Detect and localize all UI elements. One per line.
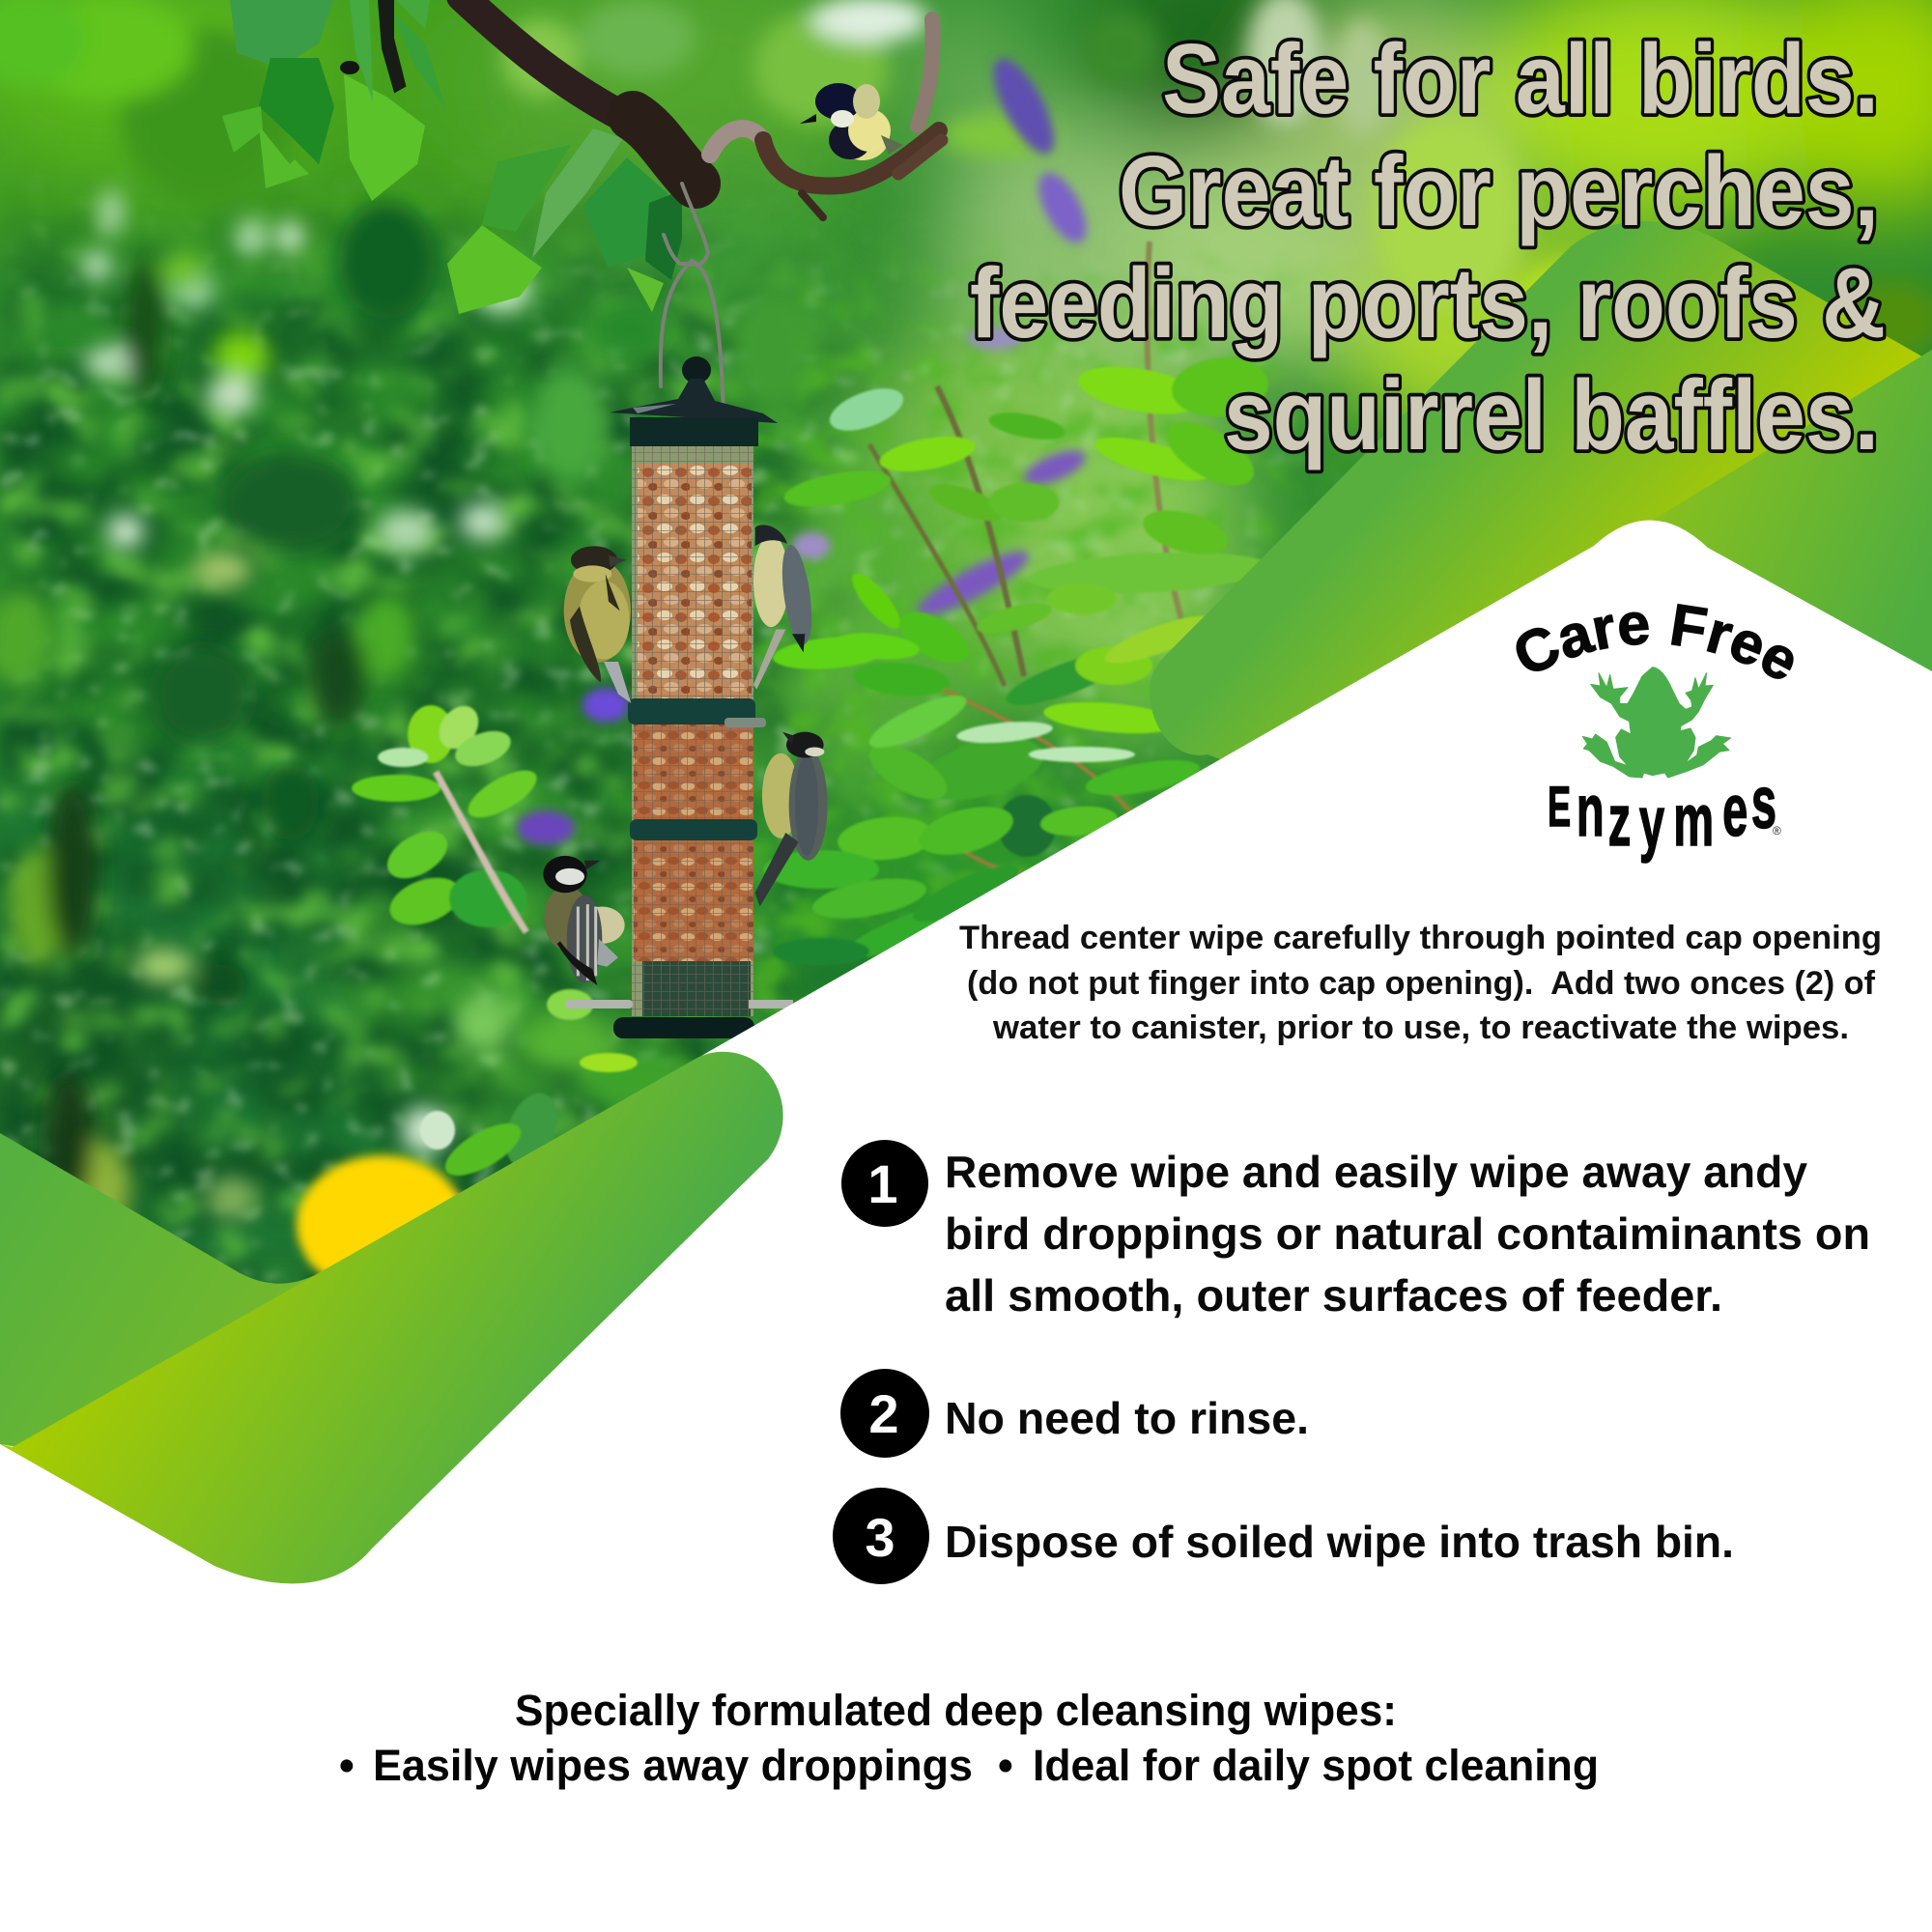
icon: bird feeder xyxy=(565,356,793,1038)
bottom benefits text: • xyxy=(998,1741,1013,1790)
step 2 xyxy=(840,1369,1309,1458)
bokeh blobs xyxy=(0,0,1932,1236)
right green band xyxy=(1642,350,1932,686)
bird upper left xyxy=(564,546,631,703)
panel: top-right green shape xyxy=(1150,221,1932,773)
step 1 number badge xyxy=(841,1140,928,1227)
step 3 text: Dispose of soiled wipe into trash bin. xyxy=(945,1517,1734,1567)
out-of-focus foliage colour zones xyxy=(0,0,1932,1314)
photo background: birds at a garden feeder xyxy=(0,0,1932,1284)
icon: frog xyxy=(1582,668,1731,778)
bottom benefits text: • xyxy=(339,1741,355,1790)
logo: Care Free Enzymes xyxy=(1517,603,1794,864)
instructions text block: water to canister, prior to use, to reactivate the wipes. xyxy=(992,1009,1849,1046)
purple flowers xyxy=(517,50,1096,845)
bird lower right xyxy=(755,732,828,907)
icon: birds on feeder xyxy=(543,525,828,985)
bottom benefits text: Specially formulated deep cleansing wipes: xyxy=(515,1686,1397,1735)
darker green chevron xyxy=(0,1133,328,1449)
foreground leaves and twigs around feeder xyxy=(352,242,1271,1186)
step 1 text xyxy=(945,1147,1870,1321)
step 2 text: No need to rinse. xyxy=(945,1393,1309,1443)
logo text bottom: Enzymes xyxy=(1548,763,1776,864)
step 1 text: bird droppings or natural contaiminants on xyxy=(945,1208,1870,1259)
bottom benefits text: Easily wipes away droppings xyxy=(373,1741,973,1790)
step 1 text: Remove wipe and easily wipe away andy xyxy=(945,1147,1807,1197)
icon: feeder hook and wires xyxy=(661,184,724,415)
step 3 number badge xyxy=(833,1488,929,1584)
feeder mesh and peanuts xyxy=(632,446,753,1016)
registered mark: ® xyxy=(1773,824,1781,838)
feeder bands xyxy=(628,698,757,840)
step 1 text: all smooth, outer surfaces of feeder. xyxy=(945,1270,1722,1321)
lime gradient chevron xyxy=(0,1052,783,1583)
logo text top: Care Free xyxy=(1517,603,1794,679)
yellow flower xyxy=(297,1155,467,1294)
step 2 number badge: 2 xyxy=(868,1383,899,1444)
step 1 xyxy=(841,1140,1870,1321)
lime-to-green rounded chevron xyxy=(1150,221,1927,773)
step 3 number badge: 3 xyxy=(865,1507,895,1568)
panel: white content background xyxy=(0,520,1932,1932)
icon: leaves on upper branch xyxy=(222,0,682,314)
bird lower left xyxy=(543,856,625,985)
step 2 number badge xyxy=(840,1369,929,1458)
feeder perches and base xyxy=(565,718,793,1038)
step 1 number badge: 1 xyxy=(867,1153,898,1214)
bottom benefits text: Ideal for daily spot cleaning xyxy=(1033,1741,1599,1790)
icon: small bird on branch xyxy=(800,83,903,160)
icon: hanging branch xyxy=(462,0,942,217)
panel: lower-left green shapes xyxy=(0,1052,783,1583)
heading xyxy=(970,23,1886,470)
instructions text block: Thread center wipe carefully through pointed cap opening xyxy=(959,920,1882,956)
instructions text block xyxy=(959,920,1882,1046)
step 3 xyxy=(833,1488,1734,1584)
instructions text block: (do not put finger into cap opening). Add two onces (2) of xyxy=(967,965,1876,1002)
mottled foliage texture, centre xyxy=(672,253,1304,1061)
feeder lid xyxy=(610,356,778,446)
bird upper right xyxy=(753,525,817,690)
mottled foliage texture, left xyxy=(0,185,862,1283)
bottom benefits text xyxy=(339,1686,1599,1790)
